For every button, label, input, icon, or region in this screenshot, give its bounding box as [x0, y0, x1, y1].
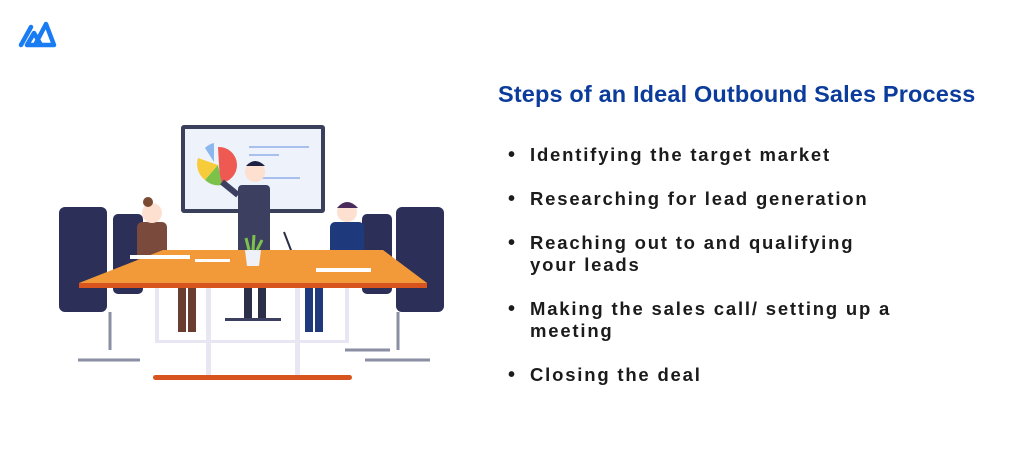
list item 4: meeting: [530, 320, 614, 341]
presenter: [222, 161, 281, 321]
list item 3: •: [508, 232, 517, 254]
list item 5: •: [508, 364, 517, 386]
table: [79, 235, 427, 380]
list item 3: [508, 232, 854, 275]
monitor: [181, 125, 325, 213]
list item 2: •: [508, 188, 517, 210]
list item 4: •: [508, 298, 517, 320]
list item 1: •: [508, 144, 517, 166]
man right: [284, 202, 364, 332]
list item 3: Reaching out to and qualifying: [530, 232, 854, 253]
list item 4: Making the sales call/ setting up a: [530, 298, 891, 319]
list item 4: [508, 298, 891, 341]
woman: [137, 197, 196, 332]
illustration: meeting room: [59, 125, 444, 380]
chairs: [59, 207, 444, 312]
logo icon: [18, 22, 56, 48]
list item 2: Researching for lead generation: [530, 188, 869, 209]
list item 5: Closing the deal: [530, 364, 702, 385]
list item 1: Identifying the target market: [530, 144, 831, 165]
title: Steps of an Ideal Outbound Sales Process: [498, 81, 975, 107]
list item 3: your leads: [530, 254, 641, 275]
